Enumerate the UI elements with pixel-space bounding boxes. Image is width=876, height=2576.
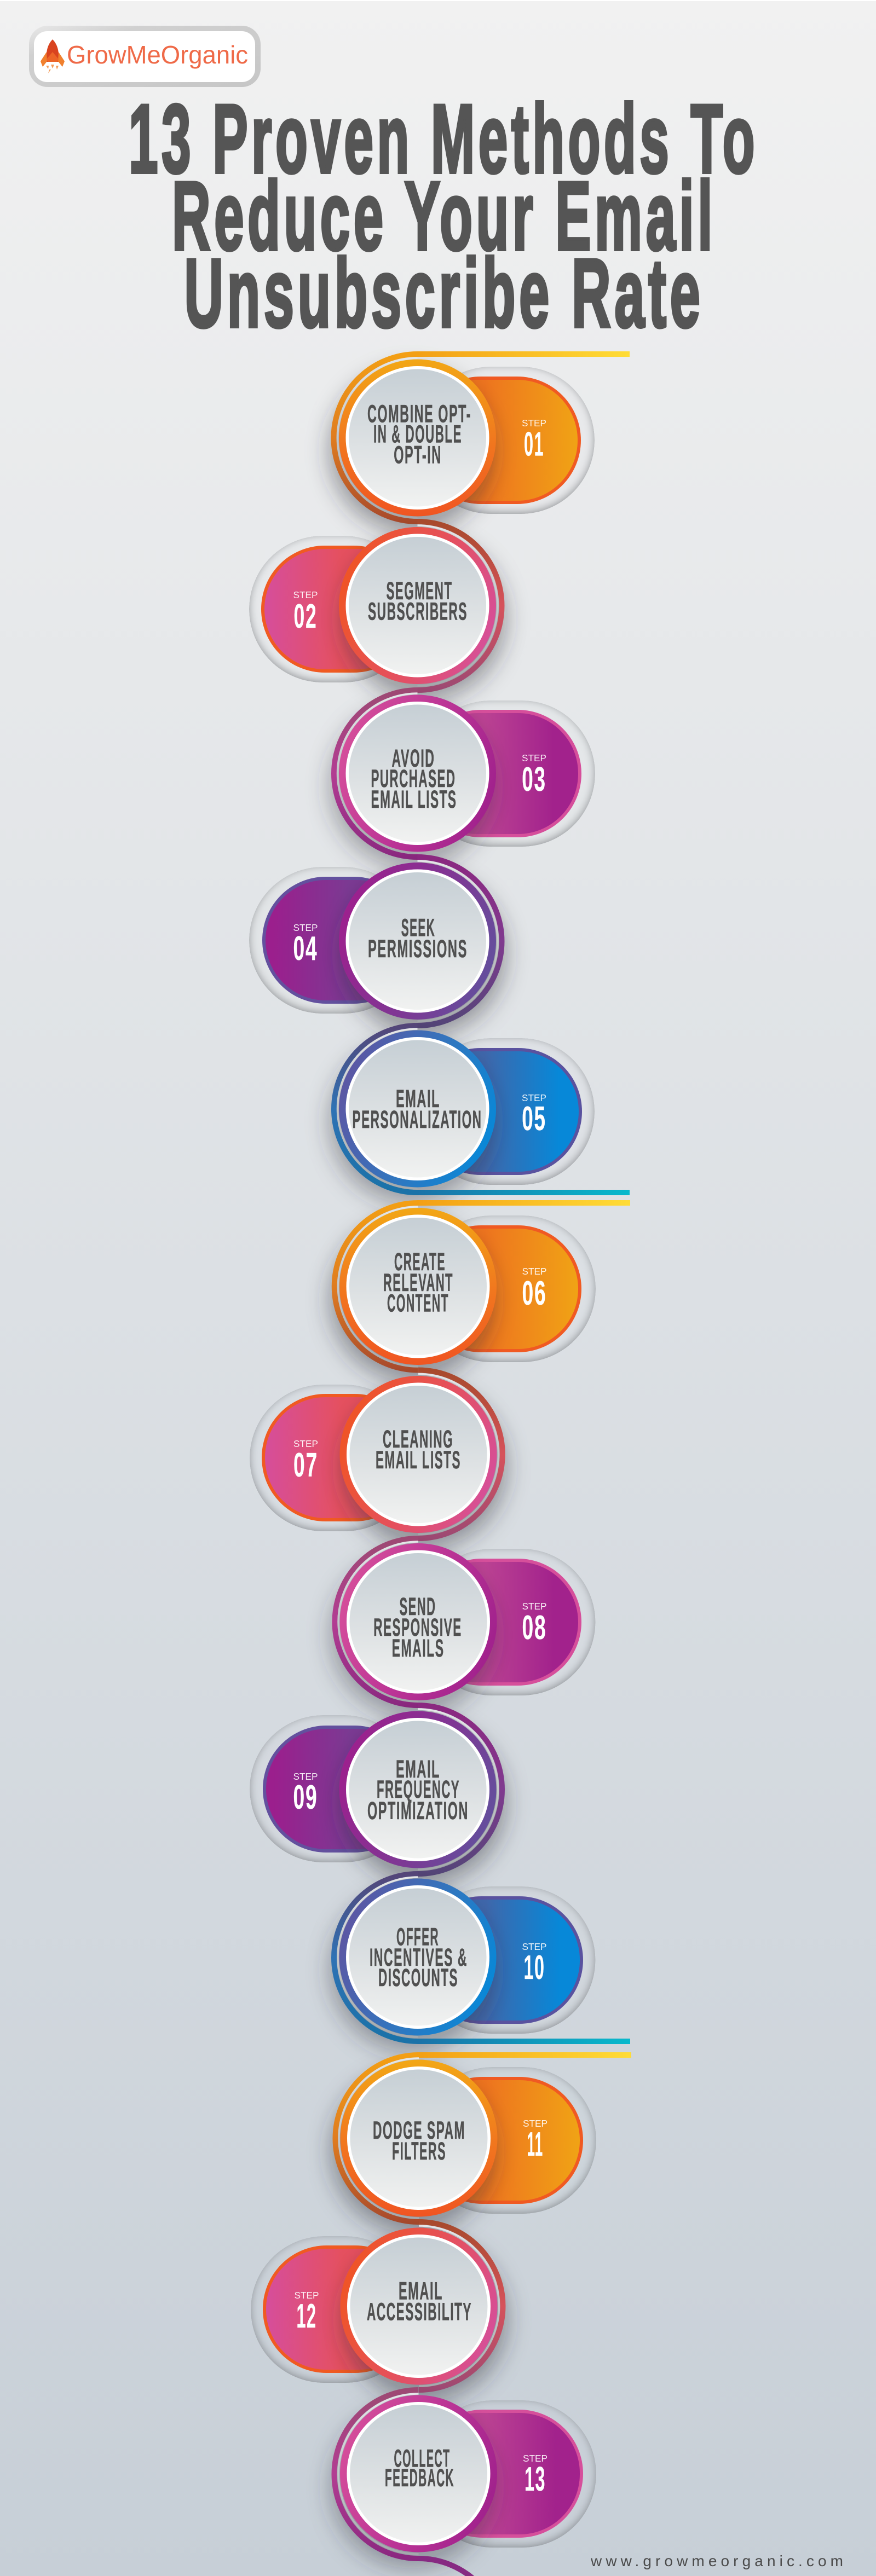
connector line bbox=[334, 1026, 630, 1195]
step number: 06 bbox=[522, 1275, 546, 1312]
step number: 09 bbox=[293, 1779, 318, 1816]
label bbox=[367, 400, 471, 468]
step number: STEP bbox=[293, 589, 318, 600]
step number bbox=[293, 1438, 318, 1484]
connector line bbox=[417, 857, 502, 1026]
step 13 bbox=[330, 2390, 596, 2576]
step 13: COLLECT bbox=[394, 2445, 450, 2473]
label bbox=[367, 1755, 469, 1825]
connector line bbox=[334, 2390, 503, 2576]
connector line bbox=[419, 2222, 503, 2390]
label: SEEK bbox=[401, 914, 435, 941]
label: SEND bbox=[400, 1593, 436, 1620]
step number bbox=[295, 2290, 319, 2335]
step number: STEP bbox=[522, 1092, 546, 1103]
step 07 bbox=[250, 1370, 507, 1549]
label: EMAIL bbox=[396, 1085, 440, 1113]
label: CONTENT bbox=[387, 1289, 449, 1317]
label: OPT-IN bbox=[394, 441, 442, 468]
step 06: RELEVANT bbox=[383, 1269, 453, 1296]
step number bbox=[522, 418, 546, 463]
connector line bbox=[334, 690, 417, 857]
pill: step 01 bbox=[417, 367, 595, 514]
connector line bbox=[418, 1370, 503, 1538]
step number bbox=[522, 752, 546, 798]
step number: 08 bbox=[522, 1609, 546, 1647]
connector line bbox=[335, 1200, 630, 1370]
pill: step 08 bbox=[418, 1549, 596, 1695]
step number: STEP bbox=[293, 922, 318, 933]
label: OFFER bbox=[396, 1923, 439, 1950]
step 09 bbox=[250, 1705, 506, 1885]
step number bbox=[522, 1092, 546, 1138]
label: EMAIL bbox=[396, 1755, 440, 1783]
step number bbox=[523, 2118, 548, 2163]
ring bbox=[340, 2395, 497, 2552]
step number bbox=[522, 1601, 546, 1647]
pill: step 04 bbox=[249, 867, 417, 1014]
step number: STEP bbox=[293, 1771, 318, 1782]
ring bbox=[341, 2060, 497, 2216]
step number bbox=[293, 589, 318, 635]
pill: step 03 bbox=[417, 701, 595, 847]
step number: STEP bbox=[522, 752, 546, 763]
step 10 bbox=[329, 1874, 630, 2052]
pill: step 09 bbox=[250, 1715, 418, 1862]
label bbox=[371, 744, 457, 813]
step number: STEP bbox=[522, 1266, 546, 1277]
pill: step 06 bbox=[418, 1215, 596, 1362]
step 02 bbox=[249, 522, 506, 701]
pill: step 11 bbox=[419, 2067, 596, 2214]
pill: step 05 bbox=[417, 1038, 595, 1185]
label: INCENTIVES & bbox=[370, 1943, 468, 1971]
pill: step 13 bbox=[419, 2400, 596, 2548]
title bbox=[129, 84, 758, 348]
label: EMAIL LISTS bbox=[371, 785, 457, 813]
label: OPTIMIZATION bbox=[367, 1797, 469, 1825]
label: FILTERS bbox=[392, 2137, 446, 2165]
label: ACCESSIBILITY bbox=[367, 2297, 472, 2326]
step 04 bbox=[249, 857, 506, 1036]
connector line bbox=[334, 1874, 630, 2044]
ring bbox=[339, 527, 496, 684]
step number: 03 bbox=[522, 761, 546, 798]
pill: step 07 bbox=[250, 1385, 418, 1531]
ring bbox=[339, 1376, 497, 1533]
label: PURCHASED bbox=[371, 765, 456, 792]
ring bbox=[339, 1711, 496, 1868]
ring bbox=[339, 862, 496, 1020]
step number bbox=[522, 1941, 546, 1987]
connector line bbox=[417, 522, 502, 690]
ring bbox=[339, 1030, 496, 1188]
step number bbox=[522, 1266, 546, 1312]
step number: 12 bbox=[297, 2297, 316, 2335]
step number bbox=[523, 2453, 548, 2498]
step 06 bbox=[329, 1200, 630, 1382]
label bbox=[385, 2445, 454, 2492]
website url: www.growmeorganic.com bbox=[590, 2552, 843, 2569]
step number bbox=[293, 922, 318, 968]
step number: 13 bbox=[525, 2461, 546, 2498]
step number: 01 bbox=[524, 426, 544, 463]
pill: step 02 bbox=[249, 536, 417, 682]
step number: STEP bbox=[522, 1601, 546, 1612]
label bbox=[370, 1923, 468, 1992]
label: RESPONSIVE bbox=[373, 1613, 462, 1641]
label: COMBINE OPT- bbox=[367, 400, 471, 428]
step number: 10 bbox=[523, 1949, 545, 1987]
step number: 11 bbox=[527, 2126, 543, 2163]
step number: STEP bbox=[523, 2118, 548, 2129]
step 08 bbox=[330, 1538, 596, 1717]
step 13: FEEDBACK bbox=[385, 2464, 454, 2492]
label bbox=[383, 1248, 453, 1317]
step number: STEP bbox=[522, 418, 546, 429]
label: EMAILS bbox=[392, 1634, 445, 1662]
label bbox=[373, 1593, 462, 1662]
label bbox=[367, 2277, 472, 2326]
step number: 05 bbox=[522, 1100, 546, 1138]
step number bbox=[293, 1771, 318, 1816]
step 05 bbox=[328, 1026, 630, 1204]
label: AVOID bbox=[392, 744, 435, 772]
step 01 bbox=[328, 351, 630, 533]
ring bbox=[339, 1208, 497, 1365]
label: PERSONALIZATION bbox=[353, 1105, 482, 1133]
label bbox=[373, 2116, 465, 2165]
ring bbox=[339, 1878, 496, 2036]
step number: STEP bbox=[293, 1438, 318, 1449]
label: DISCOUNTS bbox=[378, 1964, 458, 1992]
label: DODGE SPAM bbox=[373, 2116, 465, 2144]
label: IN & DOUBLE bbox=[373, 420, 462, 448]
ring bbox=[341, 2227, 497, 2385]
connector line bbox=[418, 1705, 502, 1874]
label: CREATE bbox=[394, 1248, 446, 1276]
pill: step 10 bbox=[418, 1886, 596, 2034]
pill: step 12 bbox=[251, 2236, 419, 2383]
step number: 04 bbox=[293, 930, 318, 968]
label: PERMISSIONS bbox=[368, 935, 468, 963]
connector line bbox=[335, 1538, 418, 1705]
connector line bbox=[334, 351, 630, 522]
label: CLEANING bbox=[383, 1425, 453, 1453]
ring bbox=[339, 695, 496, 852]
step number: 07 bbox=[293, 1446, 318, 1484]
ring bbox=[339, 359, 496, 517]
step 12 bbox=[251, 2222, 508, 2401]
label bbox=[368, 577, 468, 625]
label: EMAIL bbox=[399, 2277, 443, 2305]
logo wordmark: GrowMeOrganic bbox=[67, 40, 248, 69]
step number: 02 bbox=[293, 598, 318, 635]
label: FREQUENCY bbox=[377, 1775, 460, 1803]
label: SEGMENT bbox=[387, 577, 452, 605]
label bbox=[376, 1425, 461, 1474]
connector line bbox=[336, 2052, 631, 2222]
label: SUBSCRIBERS bbox=[368, 598, 468, 625]
step number: STEP bbox=[522, 1941, 546, 1952]
step number: STEP bbox=[295, 2290, 319, 2301]
logo badge bbox=[29, 26, 261, 87]
label bbox=[368, 914, 468, 963]
step 03 bbox=[328, 690, 595, 869]
step 07: EMAIL LISTS bbox=[376, 1446, 461, 1474]
ring bbox=[339, 1543, 497, 1700]
label bbox=[353, 1085, 482, 1133]
icon: rocket bbox=[41, 39, 65, 73]
step 11 bbox=[330, 2052, 631, 2233]
step number: STEP bbox=[523, 2453, 548, 2464]
